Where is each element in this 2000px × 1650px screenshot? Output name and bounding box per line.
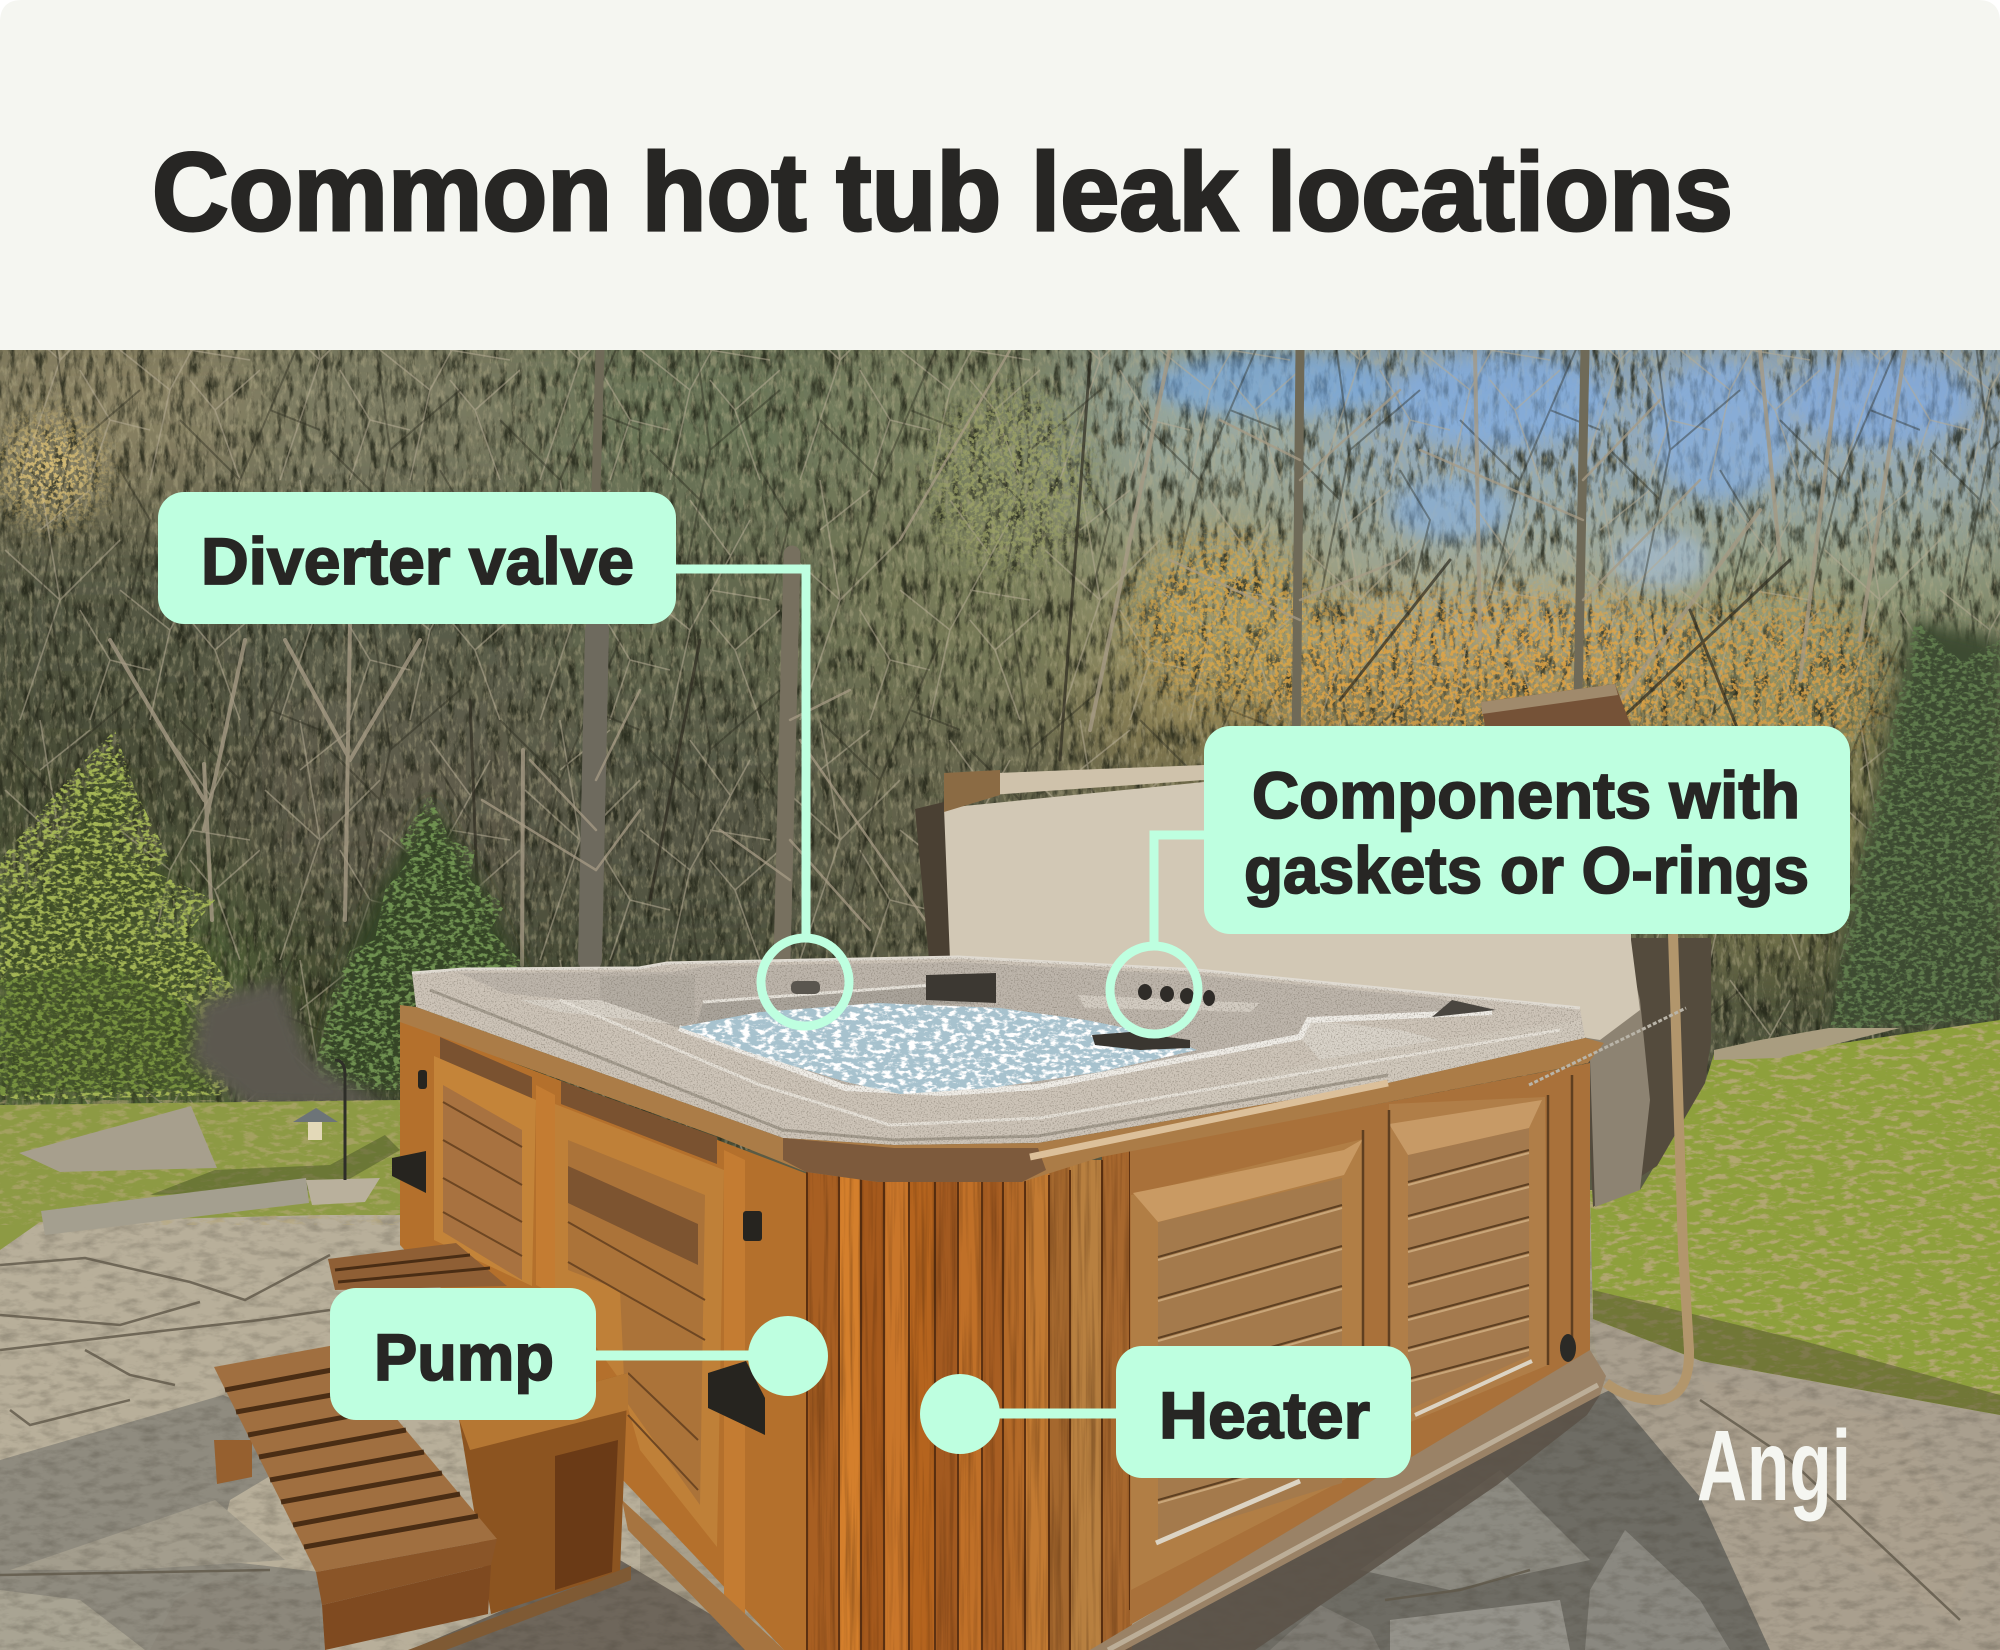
- wooden posts: [536, 1085, 745, 1650]
- right base rail: [1090, 1350, 1606, 1650]
- connector: gaskets: [1154, 835, 1204, 946]
- left panel two: [555, 1104, 724, 1547]
- sky patches: [1150, 353, 1970, 590]
- callout: diverter valve: Diverter valve: [201, 524, 634, 598]
- left side wall: [400, 1020, 810, 1650]
- connector: heater: [998, 1408, 1116, 1418]
- flat stone slabs: [41, 1178, 380, 1235]
- right panel two: [1389, 1097, 1548, 1431]
- security chain: [1529, 1008, 1686, 1085]
- churning water: [670, 1000, 1200, 1100]
- garden lamp: [293, 1060, 345, 1180]
- fine twig layers: [0, 350, 2000, 1150]
- hot tub cover: [915, 684, 1711, 1207]
- connector: pump: [596, 1350, 750, 1360]
- stone patio: [0, 1190, 2000, 1650]
- callout: components with gaskets or O-rings: Components with: [1252, 758, 1800, 832]
- headrest pillows: [926, 973, 1496, 1017]
- tan rock behind lawn: [1714, 1028, 1900, 1060]
- right side wall: [1130, 1063, 1590, 1625]
- boulder behind the tub: [190, 980, 395, 1110]
- left base rail: [622, 1500, 784, 1650]
- marker ring: gaskets: [1110, 946, 1198, 1034]
- right panel one: [1131, 1139, 1363, 1590]
- diverter valve knob: [791, 981, 820, 994]
- left boulder: [19, 1106, 217, 1172]
- bare tree trunks and branches: [110, 350, 1905, 965]
- tub wooden cabinet: [392, 1020, 1606, 1650]
- left dark boards: [440, 1037, 532, 1100]
- corner wood strips: [806, 1150, 1132, 1650]
- callout: heater: [1116, 1346, 1411, 1478]
- callout: diverter valve: [158, 492, 676, 624]
- connector: diverter valve: [676, 569, 806, 938]
- callout: components with gaskets or O-rings: gaskets or O-rings: [1244, 833, 1809, 907]
- callout: components with gaskets or O-rings: [1204, 726, 1850, 934]
- left panel one: [434, 1056, 536, 1286]
- tub rim and spa shell: [400, 950, 1600, 1150]
- conifer center: [310, 795, 530, 1090]
- lid lifter pole: [1606, 934, 1689, 1400]
- logo: Angi: Angi: [1697, 1410, 1851, 1522]
- drain grommet: [1560, 1334, 1576, 1362]
- marker dot: heater: [920, 1374, 1000, 1454]
- callout: pump: Pump: [374, 1320, 554, 1394]
- jets with gaskets: [1138, 984, 1215, 1006]
- dark jet cluster: [1092, 1032, 1190, 1050]
- header panel: [0, 0, 2000, 350]
- right lawn: [1590, 1020, 2000, 1420]
- conifer right: [1830, 620, 2000, 1030]
- left lawn: [0, 1100, 400, 1250]
- orange and yellow autumn shrubs: [0, 390, 1880, 760]
- marker dot: pump: [748, 1316, 828, 1396]
- callout: pump: [330, 1288, 596, 1420]
- black latches and handles: [392, 1070, 765, 1435]
- wooden steps: [214, 1243, 631, 1650]
- conifer left: [0, 730, 235, 1100]
- callout: heater: Heater: [1159, 1378, 1370, 1452]
- wooden rail trim: [400, 1005, 1604, 1182]
- title: Common hot tub leak locations: [152, 131, 1733, 254]
- marker ring: diverter valve: [761, 938, 849, 1026]
